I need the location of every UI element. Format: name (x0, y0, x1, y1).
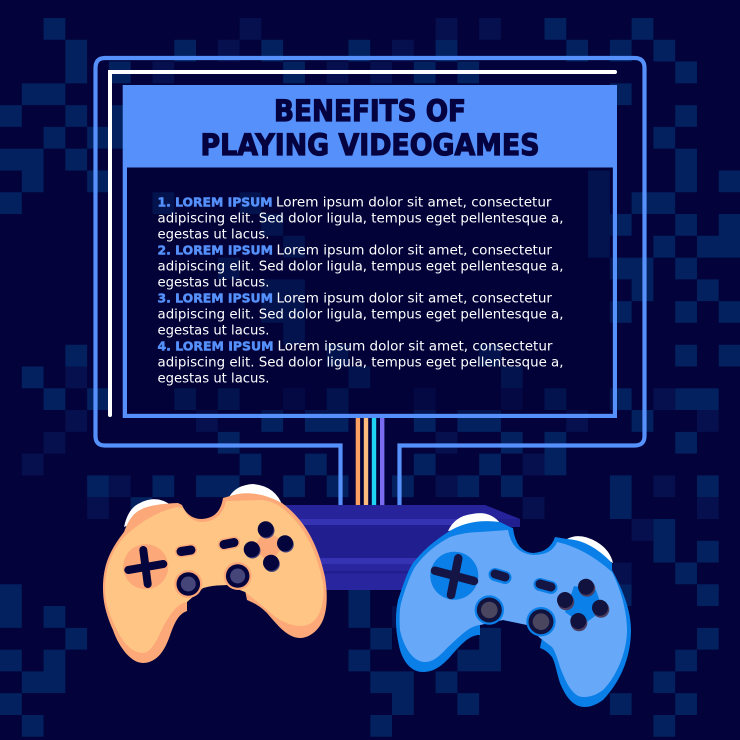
icon: orange game controller (103, 484, 327, 663)
benefit 3: egestas ut lacus. (158, 324, 270, 338)
benefit 1: egestas ut lacus. (158, 228, 270, 242)
action buttons (244, 521, 294, 572)
benefit 2: 2. LOREM IPSUM (158, 242, 273, 258)
d-pad (123, 544, 168, 589)
select and start buttons (181, 542, 234, 552)
joysticks (174, 562, 252, 598)
benefit 4: Lorem ipsum dolor sit amet, consectetur (278, 340, 553, 354)
select and start buttons (495, 574, 551, 588)
benefit 4 (158, 338, 564, 386)
benefit 2: adipiscing elit. Sed dolor ligula, tempus eget pellentesque a, (158, 260, 564, 274)
icon: blue game controller (396, 513, 631, 707)
benefit 4: egestas ut lacus. (158, 372, 270, 386)
benefit 1: Lorem ipsum dolor sit amet, consectetur (276, 196, 552, 210)
benefit 2: egestas ut lacus. (158, 276, 270, 290)
benefit 2 (158, 242, 564, 290)
benefit 2: Lorem ipsum dolor sit amet, consectetur (276, 244, 553, 258)
benefit 4: 4. LOREM IPSUM (158, 338, 274, 354)
action buttons (557, 579, 609, 631)
monitor outer frame (96, 58, 644, 505)
white highlight line (110, 72, 615, 415)
benefit 3 (158, 290, 564, 338)
title: BENEFITS OF (274, 94, 466, 128)
benefit 1: 1. LOREM IPSUM (158, 194, 272, 210)
screen panel (123, 85, 617, 418)
benefit 1 (158, 194, 564, 242)
benefit 3: 3. LOREM IPSUM (158, 290, 273, 306)
title (200, 94, 540, 162)
benefit 3: Lorem ipsum dolor sit amet, consectetur (276, 292, 553, 306)
benefit 4: adipiscing elit. Sed dolor ligula, tempus eget pellentesque a, (158, 356, 564, 370)
coloured wires (356, 418, 384, 505)
title: PLAYING VIDEOGAMES (200, 128, 540, 162)
benefit 3: adipiscing elit. Sed dolor ligula, tempus eget pellentesque a, (158, 308, 564, 322)
benefit 1: adipiscing elit. Sed dolor ligula, tempus eget pellentesque a, (158, 212, 564, 226)
d-pad (430, 552, 478, 600)
joysticks (475, 595, 556, 636)
list of benefits (158, 194, 564, 386)
game console (270, 505, 520, 590)
